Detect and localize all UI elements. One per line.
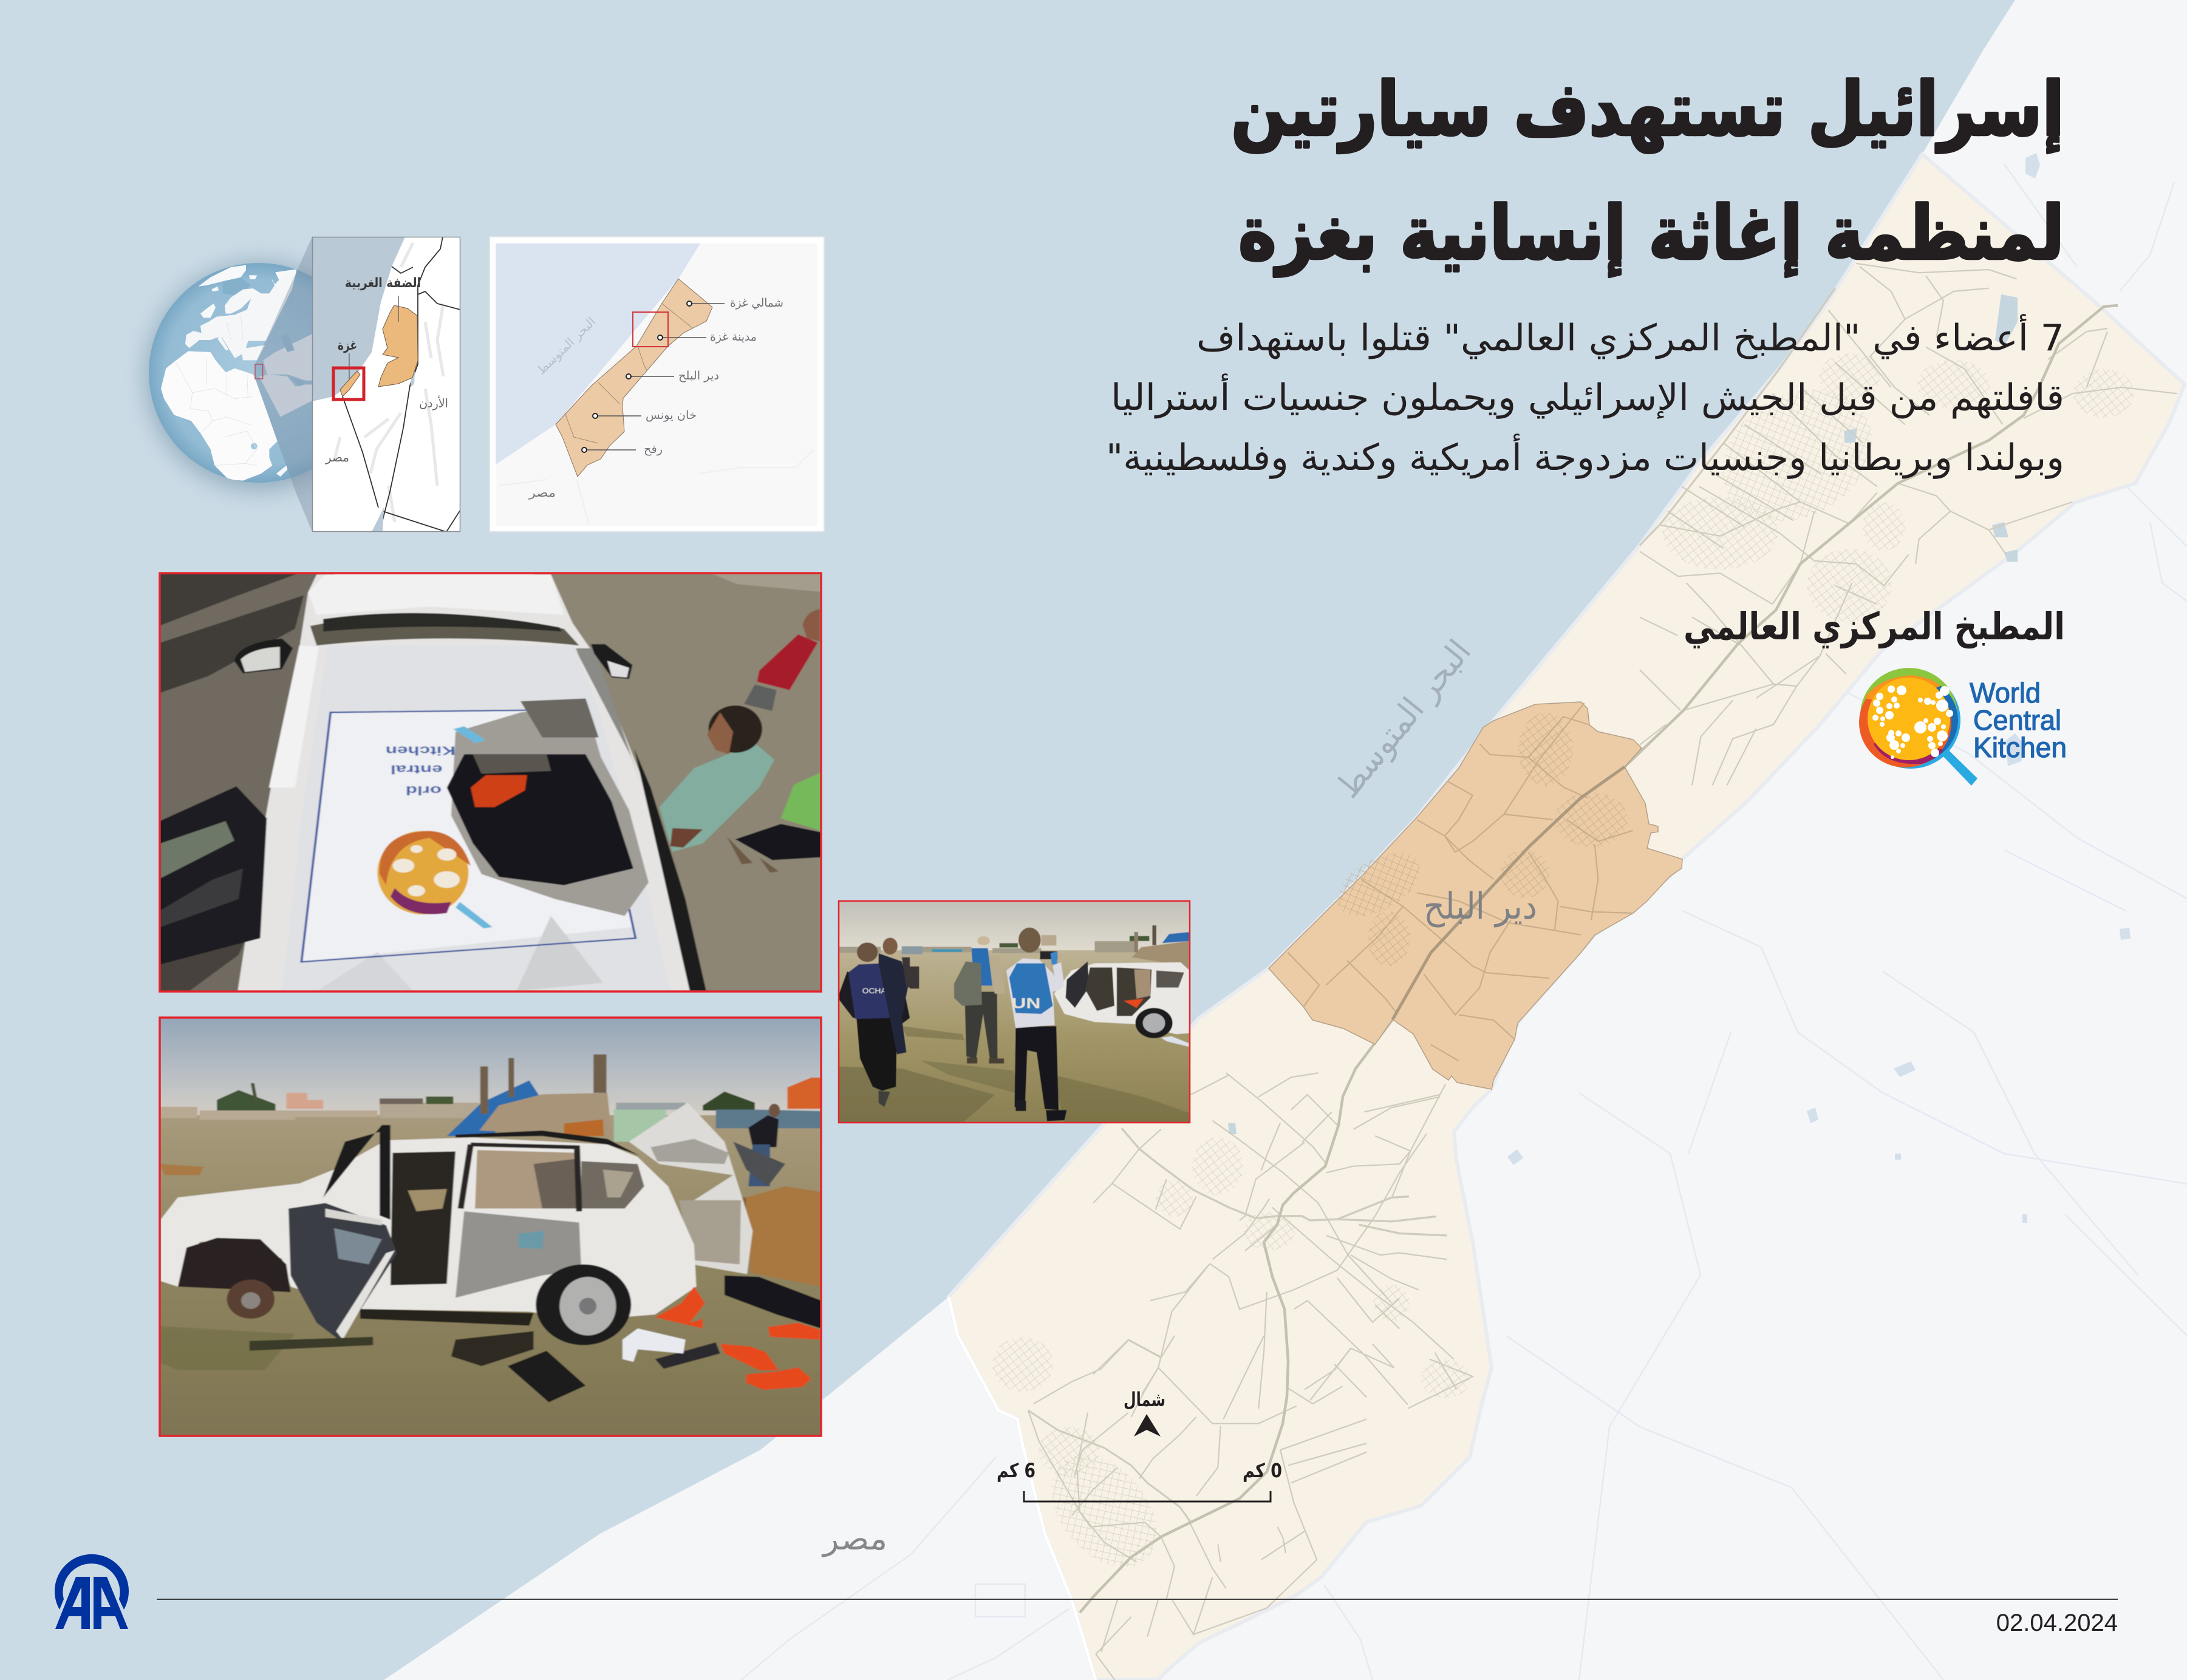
banner [282,645,670,991]
posts [480,1055,607,1114]
land: Gaza Strip [949,154,2185,1680]
icon: frying pan globe [1859,668,1977,786]
Greenland [199,265,246,287]
middle door wreck [455,1211,581,1297]
scale bar [997,1459,1282,1501]
car body [160,1137,696,1320]
logo: Anadolu Agency [55,1554,129,1629]
distant walls [839,941,1134,953]
person: OCHA [839,942,910,1107]
roads: north [1640,264,2177,604]
ground shadows [839,1067,995,1123]
city labels: شمالي غزة [730,296,783,310]
banner outline [301,710,635,962]
West Bank [378,305,418,387]
Europe [185,271,296,360]
Africa [161,351,278,481]
orange vests [655,1287,820,1390]
roads: between Gaza City and Deir al-Balah [1640,583,1852,785]
debris [250,1337,373,1351]
building [286,1093,323,1109]
title [1231,66,2064,277]
front door open [288,1203,397,1341]
Gaza Strip governorates [556,279,712,477]
sea [495,243,700,465]
car [1054,962,1190,1034]
burn marks [451,704,649,916]
windshield wiper band [310,614,579,645]
heading: World Central Kitchen in Arabic: المطبخ المركزي العالمي [1684,604,2065,648]
city labels: مصر [528,486,556,500]
earth mound [746,1186,821,1287]
locator inset: region map: مصر [325,450,349,464]
borders [176,316,257,466]
locator inset: region map: الأردن [419,396,448,410]
ground [152,565,334,999]
car body [236,574,707,999]
body text: 7 أعضاء في "المطبخ المركزي العالمي" قتلوا باستهداف [1196,314,2064,359]
interior [391,1151,455,1285]
zoom wedge [255,237,312,532]
ground [832,950,1197,1126]
scale bar: 0 كم [1243,1459,1282,1482]
Deir al-Balah roads [1288,703,1633,1061]
sky [152,1008,828,1120]
photo: UN staff inspecting the car [832,893,1197,1126]
city labels [528,296,783,500]
Deir al-Balah governorate [1269,702,1682,1089]
distant walls [160,1107,377,1120]
locator: globe [135,237,312,532]
papers [623,1328,686,1362]
right background [703,1092,755,1110]
door frame [461,1144,579,1211]
boy in red [757,634,817,690]
city labels: مدينة غزة [710,330,757,344]
roads: Rafah area [1028,1336,1366,1680]
Dead Sea and Gulf of Aqaba [411,362,415,387]
title: إسرائيل تستهدف سيارتين [1231,66,2064,153]
Gaza highlight box [333,368,364,400]
Deir al-Balah highway segment [1393,767,1625,1019]
borders [343,237,460,532]
sea label: البحر المتوسط [534,315,598,378]
right side door edge [634,749,706,991]
terrain texture [334,243,443,522]
shadow on banner [316,952,421,999]
green tent [614,1109,666,1141]
city labels: دير البلح [678,369,719,383]
north arrow: شمال [1124,1388,1165,1411]
label: Mediterranean Sea: البحر المتوسط [1328,633,1478,805]
sea [312,237,405,401]
locator inset: Gaza governorates [490,237,824,532]
logo wordmark: World [1970,677,2041,709]
locator inset: region map [312,237,460,532]
person: UN: UN [1011,996,1040,1012]
man in teal [660,743,774,852]
scale bar: 6 كم [997,1459,1035,1482]
shadows [152,573,304,696]
banner wordmark: entral [391,763,443,777]
body text [1106,314,2064,479]
city labels: خان يونس [646,409,697,422]
logo wordmark: Kitchen [1973,732,2067,763]
Egypt border stripe [949,1297,1096,1680]
date: 02.04.2024 [1996,1610,2118,1636]
labels: الضفة الغربية [345,276,421,291]
globe [149,263,312,483]
roads: central and southern [1093,1073,1473,1409]
highlight box [633,312,668,347]
person behind [879,953,909,1055]
banner wordmark [386,744,455,797]
side strips [269,645,319,787]
footer rule [157,1599,2118,1600]
highway [1080,305,2118,1613]
faint background lines [498,449,814,526]
label: Deir al-Balah: دير البلح [1424,885,1537,928]
body text: وبولندا وبريطانيا وجنسيات مزدوجة أمريكية وكندية وفلسطينية" [1106,434,2064,479]
ponds in Gaza [1228,294,2018,1134]
tent [1132,941,1190,970]
open door [160,786,267,965]
urban areas [992,353,2134,1587]
leader lines [349,296,398,379]
photo: damaged car roof with logo [152,565,838,999]
orange vest [471,775,527,807]
ground [152,1115,828,1444]
label: Egypt: مصر [821,1521,887,1557]
city markers [582,301,725,452]
blue tent [447,1080,540,1136]
Asia and Arabia [263,334,312,381]
locator inset: region map: غزة [338,338,357,353]
man [748,1115,779,1148]
wheels [227,1280,275,1319]
sky [832,893,1197,950]
logo wordmark [1970,677,2067,763]
city labels: رفح [644,443,663,456]
car rear door [629,1103,752,1274]
beige tent [479,1093,612,1136]
photo: burned car side view [152,1008,828,1444]
north arrow [1124,1388,1165,1437]
boy in green [781,772,821,831]
wheel arch [178,1238,291,1292]
trees [217,1090,276,1110]
Gaza mini [340,371,360,396]
person: OCHA: OCHA [862,987,887,995]
Madagascar and lake [276,466,287,477]
mirrors [234,639,293,673]
sill [360,1309,534,1325]
hole [447,754,633,885]
globe shadow [147,263,374,490]
title: لمنظمة إغاثة إنسانية بغزة [1238,190,2064,277]
person with backpack [954,936,1005,1064]
banner wordmark: orld [406,783,442,797]
body text: قافلتهم من قبل الجيش الإسرائيلي ويحملون جنسيات أستراليا [1111,373,2064,419]
logo: World Central Kitchen [1859,668,2067,786]
person: UN [1006,928,1067,1121]
logo on banner [377,831,468,914]
locator rectangle [255,364,263,379]
urban areas in Deir al-Balah [1326,713,1628,966]
land details: faint rivers, roads and ponds [741,164,2187,1680]
roof rack [455,1131,640,1155]
logo wordmark: Central [1973,704,2061,736]
banner wordmark: Kitchen [386,744,455,758]
British Isles [200,304,216,318]
